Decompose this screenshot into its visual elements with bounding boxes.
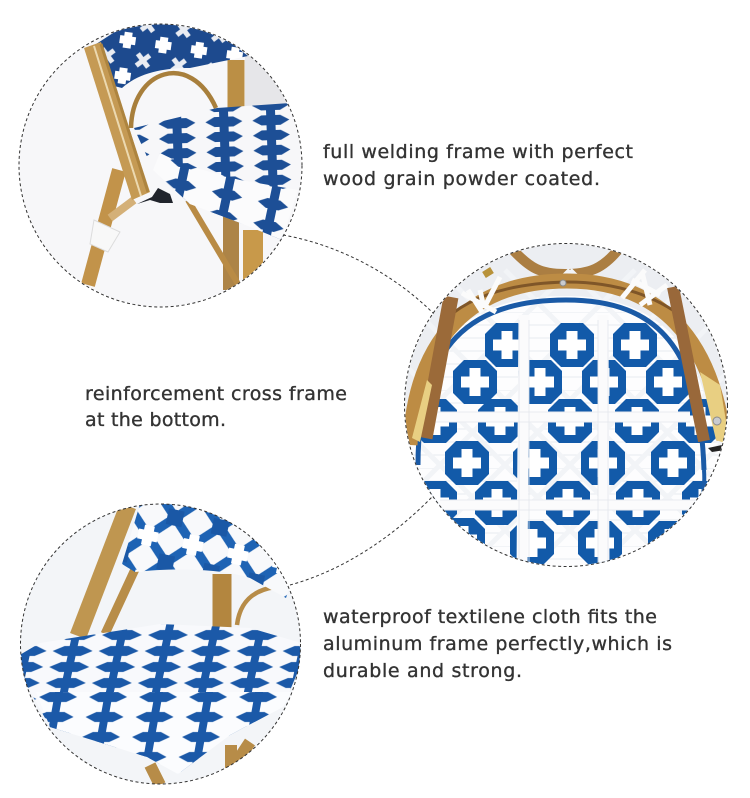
small top arch	[513, 250, 618, 274]
diagonal lattice	[421, 268, 722, 549]
tall back posts	[78, 506, 128, 636]
connector line: top circle to right circle	[283, 235, 434, 314]
main back post tube	[84, 42, 150, 200]
black end cap	[137, 188, 173, 204]
right wooden bar	[673, 287, 704, 441]
black foot cap	[708, 445, 722, 452]
text: welding frame caption: full welding frame with perfect	[323, 141, 633, 163]
seat front edge	[153, 153, 298, 240]
frame rivets	[560, 280, 721, 425]
text: textilene cloth caption: durable and strong.	[323, 660, 522, 682]
text: cross frame caption: reinforcement cross frame	[85, 383, 347, 405]
bottom legs	[150, 742, 250, 785]
blue seat border	[418, 300, 704, 470]
diagonal leg	[188, 200, 238, 284]
rear upright tube	[228, 60, 244, 112]
white reinforcement cross straps	[432, 315, 700, 570]
arch support	[237, 587, 275, 625]
lower left leg	[88, 170, 119, 285]
curved bamboo frame	[410, 281, 724, 445]
photo circle: textilene seat	[15, 500, 310, 790]
left wooden bar	[425, 297, 451, 438]
octagon blue pattern	[413, 323, 726, 565]
text: cross frame caption: at the bottom.	[85, 409, 226, 431]
right white strap	[622, 270, 667, 305]
text: textilene cloth caption: waterproof textilene cloth fits the	[323, 606, 657, 628]
woven seat	[134, 103, 304, 240]
front right leg	[243, 230, 263, 285]
rear leg	[223, 210, 239, 290]
woven backrest	[122, 504, 292, 598]
photo circle: welded chair frame	[15, 20, 310, 310]
woven seat	[18, 624, 304, 774]
connector line: bottom circle to right circle	[290, 496, 433, 585]
text: textilene cloth caption: aluminum frame perfectly,which is	[323, 633, 672, 655]
text: welding frame caption: wood grain powder coated.	[323, 168, 600, 190]
white wrap binding	[90, 220, 120, 252]
photo circle: underside of seat with cross frame	[400, 240, 740, 575]
cross brace	[110, 200, 134, 218]
upright tube	[212, 574, 232, 628]
arched back support	[131, 73, 216, 128]
left white strap	[462, 277, 500, 312]
woven backrest	[90, 22, 248, 88]
seat front weave	[36, 692, 292, 774]
woven seat underside	[402, 296, 735, 570]
gold tube stub	[484, 270, 492, 275]
yellow tube ends	[412, 372, 730, 445]
